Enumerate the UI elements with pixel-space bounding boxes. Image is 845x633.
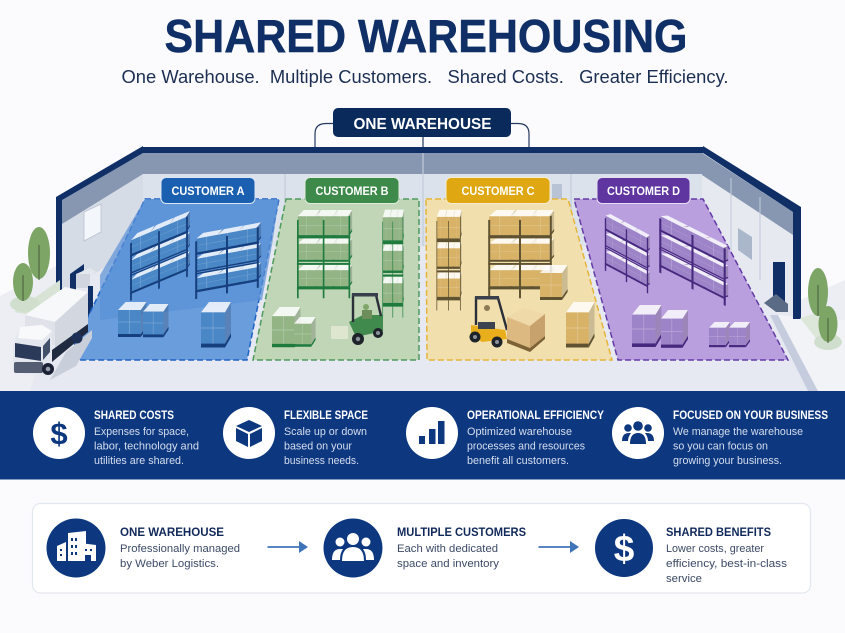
trees left: [10, 227, 60, 316]
label: customer B: [305, 178, 399, 204]
customer A shelves and pallets: [118, 211, 261, 348]
customer B shelves and pallets: [272, 210, 404, 347]
benefit: operational efficiency: [406, 407, 604, 467]
customer C shelves and pallets: [436, 210, 594, 348]
bottom process card: [32, 504, 810, 593]
benefit: shared costs: Expenses for space,: [94, 426, 189, 438]
step: shared benefits: SHARED BENEFITS: [666, 525, 771, 539]
ground right of road: [778, 315, 845, 391]
benefit: operational efficiency: Optimized warehouse: [467, 426, 572, 438]
label: customer A: [161, 178, 255, 204]
benefit: shared costs: utilities are shared.: [94, 455, 184, 467]
right loading dock: [764, 262, 788, 312]
icon: bar chart: [406, 407, 458, 459]
connector bracket: [315, 124, 529, 147]
benefit: focused on your business: FOCUSED ON YOUR BUSINESS: [673, 410, 828, 422]
icon: people: [612, 407, 664, 459]
warehouse illustration: [0, 108, 845, 391]
label: customer C: [446, 178, 550, 204]
road edge: [770, 315, 818, 391]
benefit: operational efficiency: OPERATIONAL EFFICIENCY: [467, 410, 604, 422]
truck: [13, 287, 92, 380]
ground: [0, 264, 845, 391]
roof beam: [143, 147, 703, 153]
icon: dollar: $: [614, 528, 635, 569]
benefit: operational efficiency: benefit all customers.: [467, 455, 569, 467]
icon: dollar: [33, 407, 85, 459]
forklift B: [331, 293, 383, 345]
one warehouse badge: ONE WAREHOUSE: [354, 116, 492, 133]
benefit: flexible space: FLEXIBLE SPACE: [284, 410, 368, 422]
icon: buildings: [46, 518, 106, 578]
step: multiple customers: Each with dedicated: [397, 543, 498, 555]
step: one warehouse: [46, 518, 240, 578]
benefit: focused on your business: growing your business.: [673, 455, 782, 467]
step: one warehouse: Professionally managed: [120, 543, 240, 555]
benefits band: [0, 391, 845, 480]
step: shared benefits: [595, 519, 788, 585]
step: shared benefits: Lower costs, greater: [666, 543, 764, 555]
benefit: operational efficiency: processes and resources: [467, 440, 585, 452]
arrow: [268, 541, 308, 553]
icon: dollar: $: [50, 416, 68, 451]
zone A: [67, 178, 279, 360]
benefit: flexible space: Scale up or down: [284, 426, 367, 438]
zone C: [426, 178, 612, 360]
left dock: [70, 264, 96, 334]
benefit: flexible space: [223, 407, 368, 467]
right wall: [702, 146, 801, 319]
forklift C: [470, 296, 507, 348]
icon: people: [324, 518, 382, 578]
subtitle: One Warehouse. Multiple Customers. Shared Costs. Greater Efficiency.: [122, 66, 728, 87]
zone D: [574, 178, 788, 360]
back wall: [143, 153, 703, 246]
label: customer A: CUSTOMER A: [172, 184, 245, 198]
customer D shelves and pallets: [605, 211, 750, 348]
step: multiple customers: space and inventory: [397, 558, 500, 570]
icon: box: [223, 407, 275, 459]
label: customer D: CUSTOMER D: [607, 184, 680, 198]
benefit: flexible space: business needs.: [284, 455, 359, 467]
arrow: [538, 541, 579, 553]
step: shared benefits: service: [666, 573, 702, 585]
step: multiple customers: MULTIPLE CUSTOMERS: [397, 525, 526, 539]
label: customer C: CUSTOMER C: [462, 184, 535, 198]
large pallet C: [507, 308, 545, 352]
benefit: focused on your business: so you can focus on: [673, 440, 768, 452]
benefit: shared costs: SHARED COSTS: [94, 410, 174, 422]
benefit: focused on your business: [612, 407, 828, 467]
one warehouse badge: [333, 108, 511, 137]
step: shared benefits: efficiency, best-in-class: [666, 558, 788, 570]
benefit: focused on your business: We manage the warehouse: [673, 426, 803, 438]
left wall: [56, 146, 143, 292]
icon: dollar: [595, 519, 653, 577]
floor: [30, 245, 830, 391]
zone B: [253, 178, 419, 360]
label: customer D: [597, 178, 690, 204]
step: multiple customers: [324, 518, 526, 578]
step: one warehouse: ONE WAREHOUSE: [120, 525, 224, 539]
label: customer B: CUSTOMER B: [316, 184, 389, 198]
benefit: shared costs: [33, 407, 199, 467]
trees right: [800, 268, 842, 350]
benefit: flexible space: based on your: [284, 440, 352, 452]
benefit: shared costs: labor, technology and: [94, 440, 199, 452]
step: one warehouse: by Weber Logistics.: [120, 558, 219, 570]
title: SHARED WAREHOUSING: [164, 10, 688, 62]
